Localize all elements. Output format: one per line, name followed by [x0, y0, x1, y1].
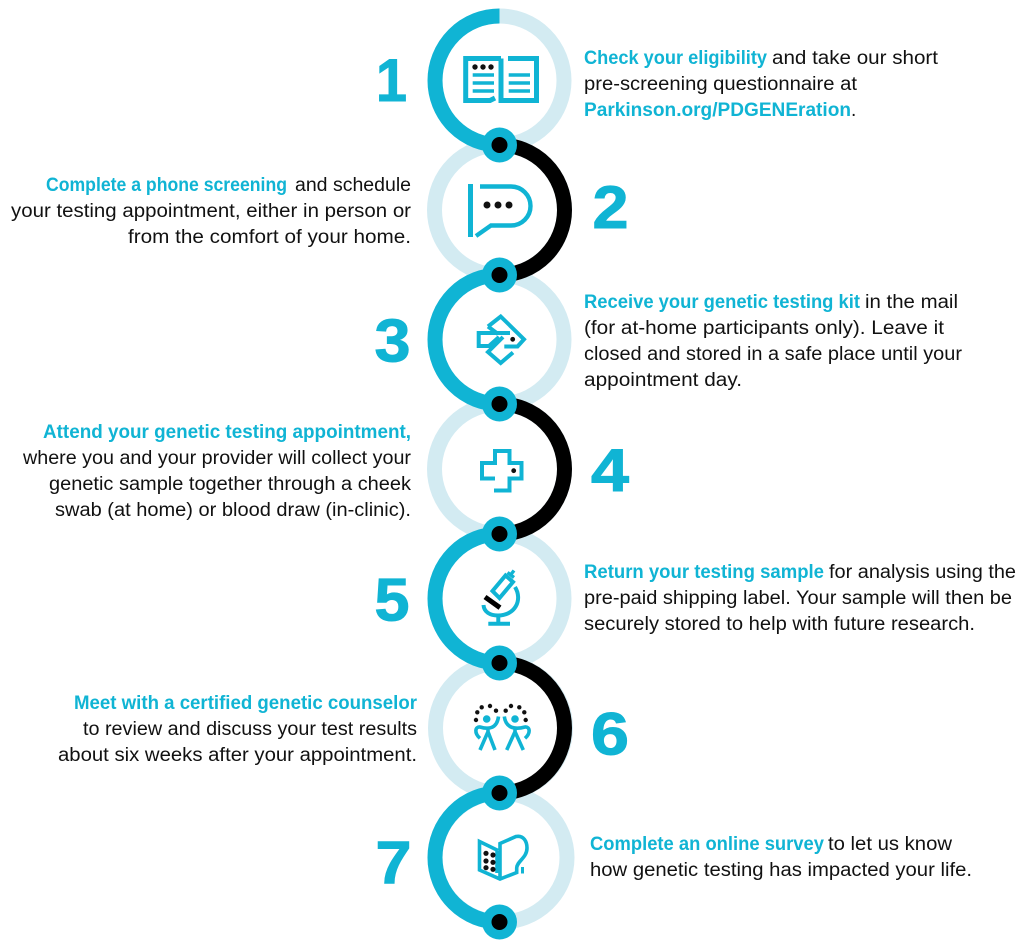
- step 7 text: [590, 834, 972, 881]
- step 5 text: pre-paid shipping label. Your sample will then be: [584, 588, 1012, 609]
- step 4 text: genetic sample together through a cheek: [49, 474, 412, 495]
- step 4 number: 4: [591, 437, 630, 504]
- step 6 text: [58, 693, 418, 766]
- step 6 text: about six weeks after your appointment.: [58, 745, 417, 766]
- step 4 text: swab (at home) or blood draw (in-clinic).: [55, 500, 411, 521]
- step 6 text: Meet with a certified genetic counselor: [74, 693, 418, 714]
- step 7 number: 7: [376, 829, 412, 896]
- step 1 text: and take our short: [772, 48, 939, 69]
- icon: survey booklet: [480, 836, 527, 879]
- step 4 text: [22, 422, 412, 521]
- step 4 text: where you and your provider will collect your: [22, 448, 412, 469]
- icon: testing kit diamonds: [479, 316, 524, 363]
- step 4 text: Attend your genetic testing appointment,: [43, 422, 411, 443]
- step 5 text: securely stored to help with future research.: [584, 614, 975, 635]
- step 7 text: Complete an online survey: [590, 834, 824, 855]
- step 3 text: (for at-home participants only). Leave it: [584, 318, 945, 339]
- step 3 text: closed and stored in a safe place until your: [584, 344, 963, 365]
- icon: medical cross: [482, 451, 522, 490]
- step 1 text: pre-screening questionnaire at: [584, 74, 858, 95]
- step 2 number: 2: [592, 174, 628, 241]
- step 3 text: Receive your genetic testing kit: [584, 292, 861, 313]
- step 7 text: how genetic testing has impacted your life.: [590, 860, 972, 881]
- step 2 text: and schedule: [295, 175, 411, 196]
- icon: speech bubble: [470, 184, 530, 237]
- step 2 text: your testing appointment, either in person or: [11, 201, 412, 222]
- step 5 number: 5: [374, 566, 410, 634]
- step 5 text: for analysis using the: [829, 562, 1016, 583]
- step 1 text: .: [851, 100, 856, 121]
- icon: open book: [466, 58, 536, 100]
- step 1 number: 1: [376, 47, 407, 114]
- step 6 text: to review and discuss your test results: [83, 719, 417, 740]
- step 3 text: [584, 292, 963, 391]
- step 6 number: 6: [591, 700, 629, 768]
- icon: microscope: [484, 570, 518, 624]
- step 5 text: [584, 562, 1016, 635]
- step 1 text: [584, 48, 939, 121]
- step 3 text: in the mail: [865, 292, 958, 313]
- step 7 text: to let us know: [828, 834, 952, 855]
- step 2 text: Complete a phone screening: [46, 175, 287, 196]
- step 2 text: [11, 175, 412, 248]
- step 3 number: 3: [374, 308, 410, 374]
- step 2 text: from the comfort of your home.: [128, 227, 411, 248]
- step 1 text: Check your eligibility: [584, 48, 767, 69]
- step 3 text: appointment day.: [584, 370, 742, 391]
- chain: linked circles connecting the steps: [434, 16, 567, 940]
- step 1 text: Parkinson.org/PDGENEration: [584, 100, 851, 121]
- step 5 text: Return your testing sample: [584, 562, 824, 583]
- icon: two people high-fiving: [474, 704, 529, 750]
